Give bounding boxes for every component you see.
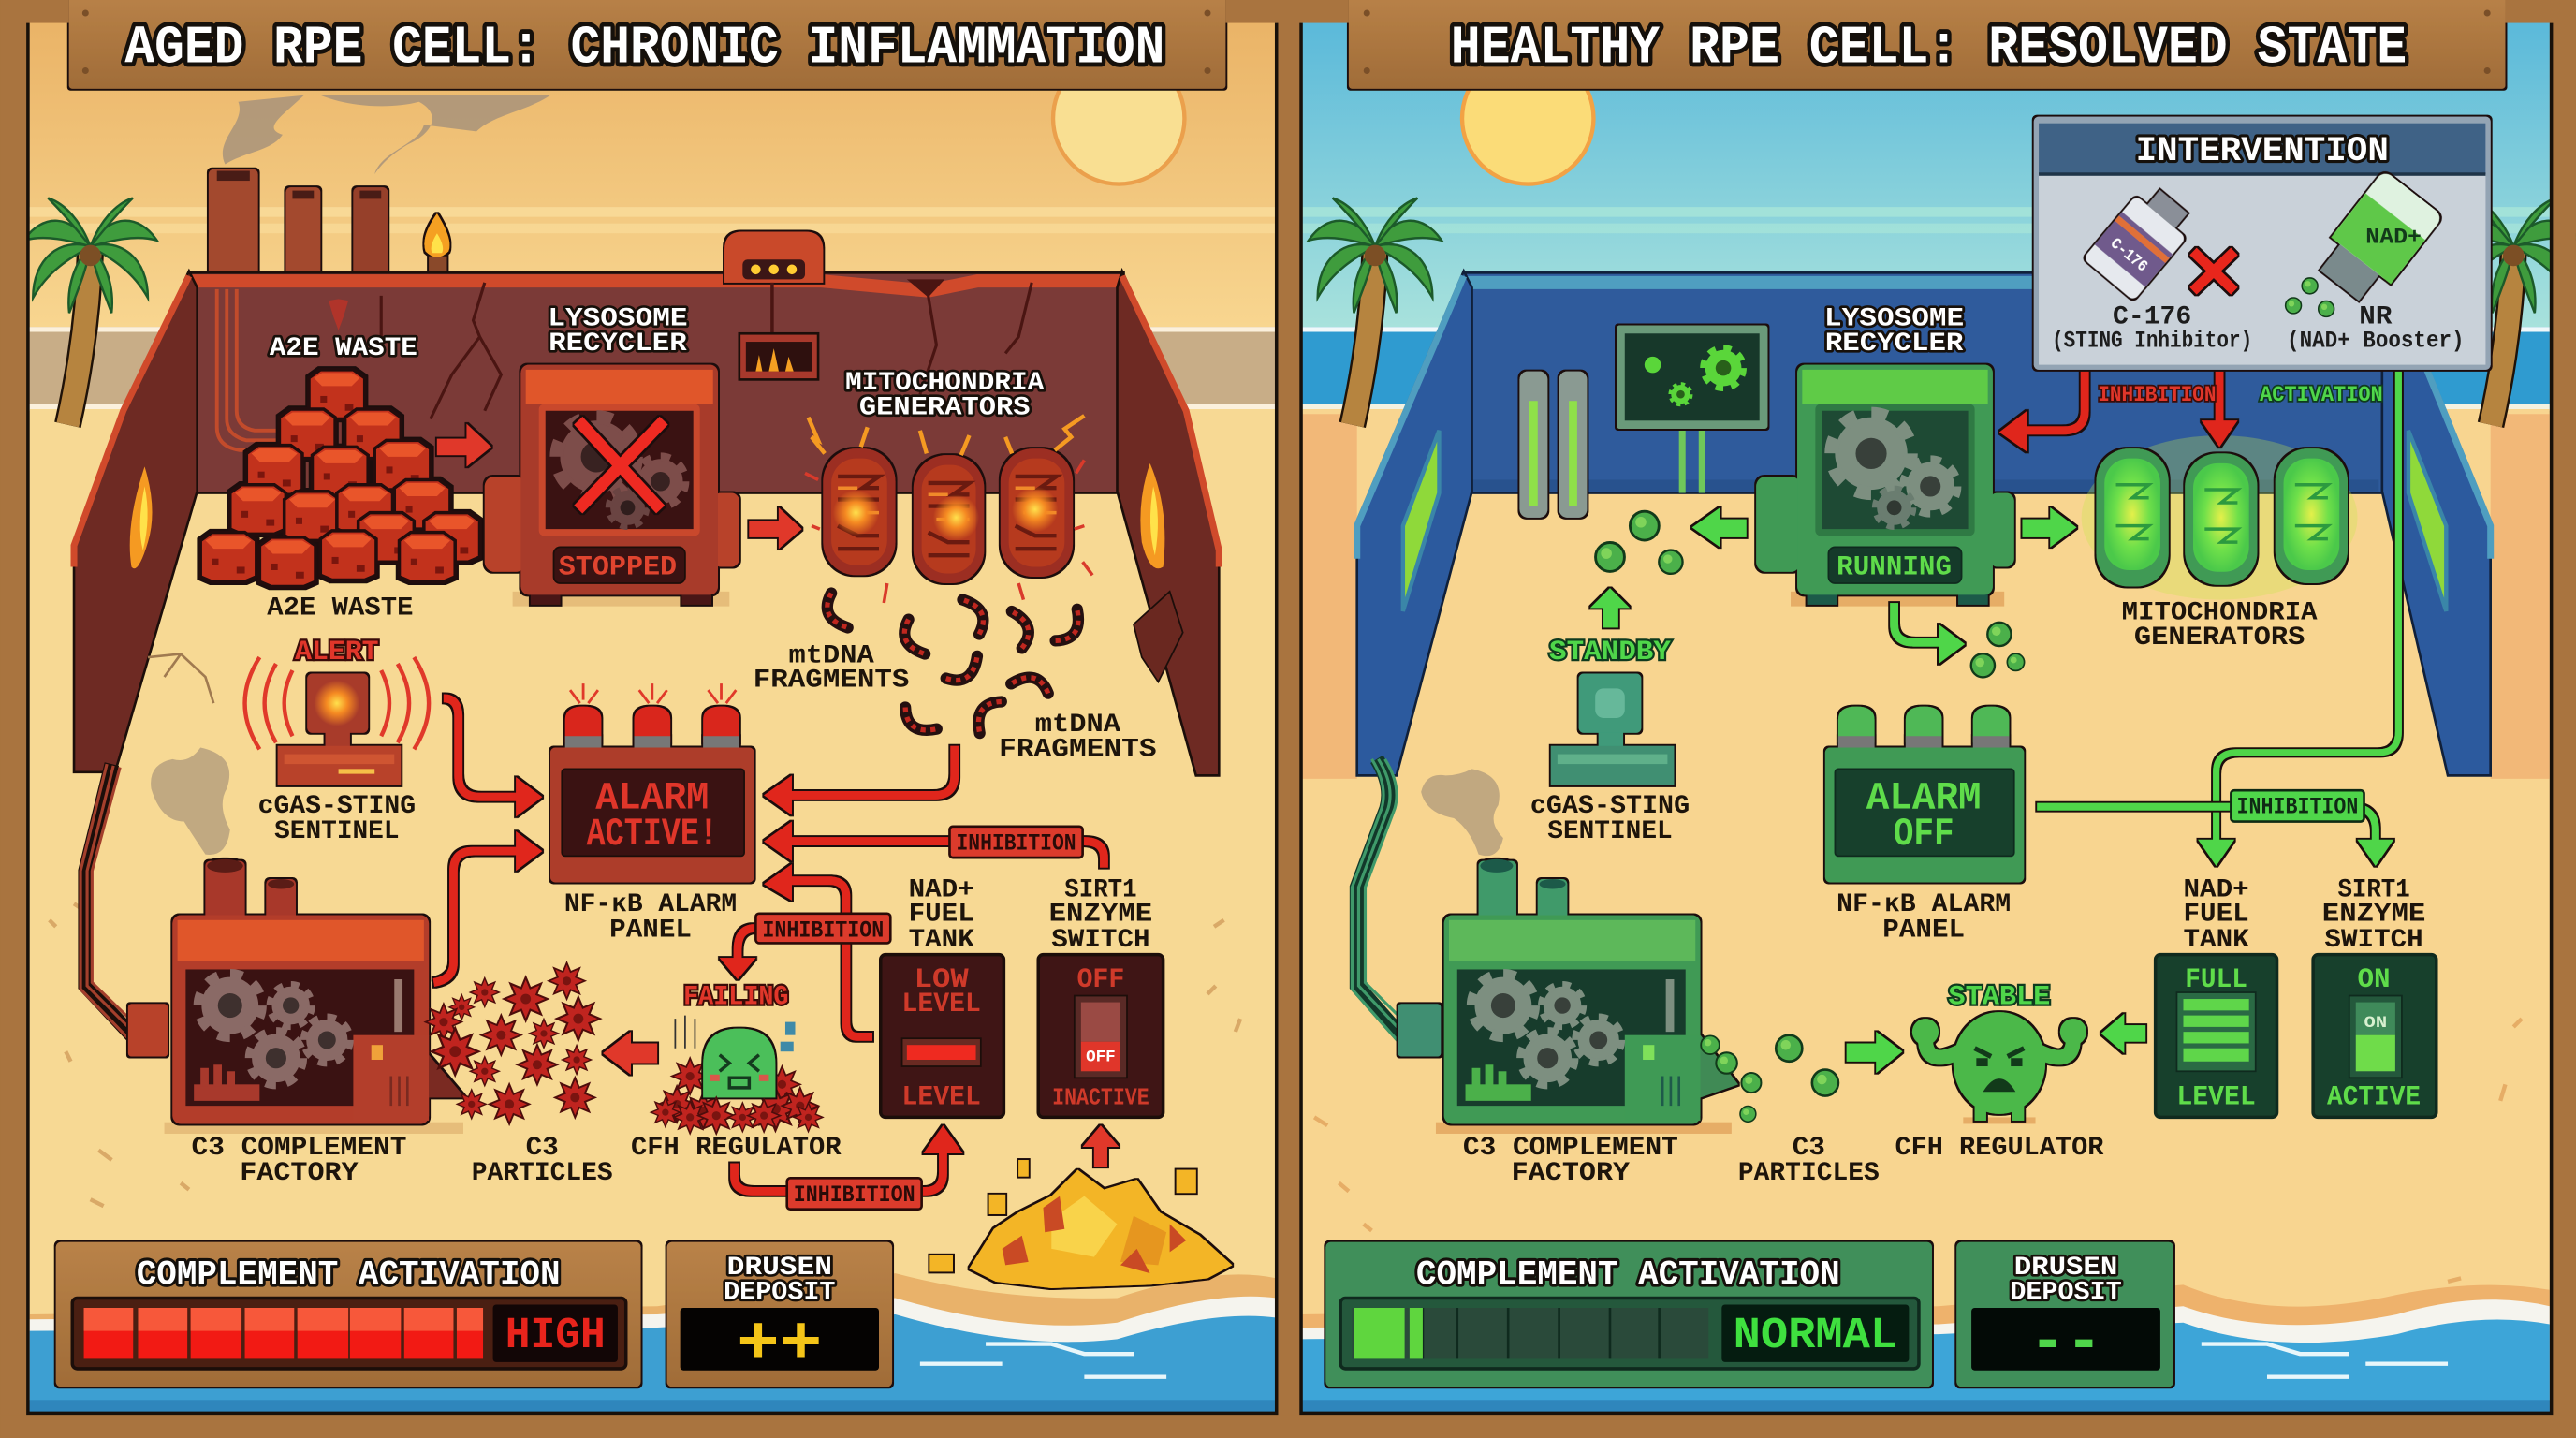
label: C3 particles: C3 [1793, 1134, 1825, 1163]
status: stopped: STOPPED [559, 550, 677, 582]
label: activation green: ACTIVATION [2260, 383, 2383, 407]
panel: complement activation normal [1325, 1242, 1932, 1387]
chimneys and torch [209, 169, 449, 281]
label: SIRT1 enzyme switch [1049, 875, 1152, 955]
label: NF-kB alarm panel: NF-κB ALARM [564, 890, 737, 919]
status: failing: FAILING [683, 980, 788, 1012]
gauge: NAD+ low level: LEVEL [902, 1080, 981, 1112]
label: inhibition red: INHIBITION [2098, 383, 2217, 407]
heading: DRUSEN [2014, 1254, 2117, 1283]
label: mtDNA fragments lower: FRAGMENTS [999, 735, 1157, 764]
label: inhibition green: INHIBITION [2237, 796, 2358, 821]
arrow: particles to CFH [1847, 1032, 1902, 1073]
wall: left side wall [74, 271, 198, 772]
label: SIRT1 enzyme switch: SIRT1 [1064, 875, 1137, 904]
label: mtDNA fragments lower: mtDNA [1035, 711, 1120, 740]
wall: right side wall [2382, 271, 2491, 775]
icon: recycled particles right [1971, 623, 2025, 677]
icon: standby tubes on wall [1519, 372, 1587, 518]
label: cGAS-STING sentinel: SENTINEL [274, 817, 400, 846]
label: NAD+ fuel tank: FUEL [909, 901, 974, 930]
gauge: SIRT1 switch off: INACTIVE [1052, 1083, 1149, 1111]
label: NR: (NAD+ Booster) [2287, 329, 2465, 354]
arrow: inhibition to CFH [720, 929, 759, 979]
arrow: recycler to mitochondria [749, 507, 802, 549]
icon: C-176 vial [2084, 181, 2199, 301]
gauge: NAD+ low level [881, 955, 1003, 1117]
heading: DEPOSIT [2010, 1278, 2122, 1307]
label: C3 particles [472, 1134, 613, 1188]
icon: strong CFH regulator [1912, 1012, 2086, 1123]
arrow: C-176 inhibits recycler [1999, 372, 2085, 452]
panel: drusen deposit plus [667, 1242, 892, 1387]
arrow: SIRT1 inhibition to alarm [764, 822, 1104, 868]
status: alarm off: OFF [1894, 812, 1954, 857]
gauge: NAD+ low level: LOW [915, 963, 969, 995]
label: SIRT1 enzyme switch: ENZYME [1049, 901, 1152, 930]
label: SIRT1 enzyme switch: SWITCH [1051, 926, 1150, 955]
gauge: NAD+ full level: LEVEL [2176, 1080, 2256, 1112]
label: cGAS-STING sentinel: cGAS-STING [258, 792, 416, 821]
machine: C3 complement factory [1398, 859, 1738, 1134]
panel: healthy RPE cell [1301, 0, 2576, 1413]
wall lamp housing [724, 231, 823, 283]
status: alarm active: ACTIVE! [587, 812, 718, 857]
heading: DRUSEN [727, 1254, 832, 1283]
status: normal: NORMAL [1734, 1312, 1897, 1361]
label: SIRT1 enzyme switch: SIRT1 [2337, 875, 2410, 904]
label: NF-kB alarm panel: PANEL [609, 916, 692, 945]
scene: dusk sky, sea and sand [30, 0, 1277, 1413]
bar: complement level [1352, 1308, 1708, 1358]
label: A2E waste: A2E WASTE [267, 594, 413, 623]
wall: left side wall [1357, 271, 1472, 775]
icon: cGAS-STING sentinel alerting [245, 657, 429, 785]
machine: NF-kB alarm panel off [1825, 707, 2024, 882]
icon: failing CFH regulator [651, 1016, 823, 1134]
arrow: NAD+ tank to CFH [2101, 1014, 2145, 1053]
label: C-176 [2052, 303, 2252, 354]
label: C-176: C-176 [2113, 303, 2191, 332]
heading: INTERVENTION [2136, 132, 2389, 171]
label: C3 complement factory: C3 COMPLEMENT [192, 1134, 407, 1163]
icon: midday sun [1462, 52, 1593, 184]
label: NAD+ fuel tank: NAD+ [2183, 875, 2249, 904]
arrow: recycler output left [1692, 507, 1747, 547]
label: inhibition NAD+: INHIBITION [794, 1183, 915, 1209]
label: lysosome recycler: LYSOSOME [1824, 304, 1964, 333]
arrow: sentinel to particles [1590, 588, 1630, 627]
label: CFH regulator: CFH REGULATOR [1895, 1134, 2104, 1163]
machine: stopped lysosome recycler [485, 365, 739, 607]
label: NAD+ fuel tank [909, 875, 974, 955]
icon: palm tree [24, 198, 157, 425]
pipes: wall to factory [85, 764, 135, 1038]
icon: cGAS-STING sentinel standby [1551, 674, 1674, 785]
wall: back wall [1466, 272, 2389, 493]
arrow: CFH inhibition to NAD+ [735, 1125, 963, 1191]
label: C3 particles: PARTICLES [472, 1159, 613, 1188]
gauge: NAD+ low level: LEVEL [902, 988, 981, 1020]
label: mtDNA fragments: mtDNA [788, 641, 874, 670]
heading: COMPLEMENT ACTIVATION [137, 1256, 561, 1296]
heading: DEPOSIT [724, 1278, 836, 1307]
label: cGAS-STING sentinel: SENTINEL [1547, 817, 1673, 846]
label: cGAS-STING sentinel [258, 792, 416, 846]
machine: NF-kB alarm panel active [550, 683, 754, 882]
label: C-176: (STING Inhibitor) [2052, 329, 2252, 354]
label: inhibition CFH: INHIBITION [762, 918, 884, 944]
smoke plumes [223, 95, 550, 174]
label: lysosome recycler: RECYCLER [549, 330, 687, 359]
arrow: fragments to alarm [764, 746, 955, 814]
label: C3 complement factory: FACTORY [240, 1159, 359, 1188]
arrow: factory to alarm [433, 831, 542, 983]
label: NF-kB alarm panel [564, 890, 737, 945]
label: lysosome recycler [548, 304, 688, 359]
smoke patch [151, 748, 230, 855]
heading [2010, 1254, 2122, 1307]
wall: right side wall [1117, 271, 1219, 775]
label: CFH regulator: CFH REGULATOR [631, 1134, 842, 1163]
icon: right palm tree [2447, 198, 2576, 425]
label: mitochondria generators [2122, 599, 2318, 653]
title: HEALTHY RPE CELL: RESOLVED STATE [1451, 19, 2407, 80]
label: NR [2287, 303, 2465, 354]
monitor: wall gear screen [1617, 325, 1767, 493]
label: lysosome recycler [1824, 304, 1964, 359]
icon: mtDNA fragments [827, 594, 1088, 740]
label: SIRT1 enzyme switch: SWITCH [2324, 926, 2423, 955]
gauge: SIRT1 switch off: OFF [1076, 963, 1124, 995]
label: NAD+ fuel tank [2183, 875, 2249, 955]
arrow: CFH to particles [603, 1032, 657, 1075]
floor cracks [148, 654, 213, 703]
label: cGAS-STING sentinel [1530, 792, 1690, 846]
wall: back wall with cracks [191, 272, 1123, 493]
scene: bright sky, sea and sand [1301, 0, 2550, 1413]
gauge: NAD+ full level [2156, 955, 2277, 1117]
label: C3 particles: C3 [526, 1134, 559, 1163]
arrow: recycler to lower particles [1895, 603, 1965, 664]
panel: intervention [2034, 117, 2491, 370]
icon: healthy mitochondria [2082, 435, 2358, 600]
label: NAD+ fuel tank: NAD+ [909, 875, 974, 904]
pipes: wall to factory [1357, 759, 1406, 1042]
label: lysosome recycler: LYSOSOME [548, 304, 688, 333]
panel: complement activation high [56, 1242, 641, 1387]
status: running: RUNNING [1837, 550, 1952, 582]
status: alarm active: ALARM [595, 775, 709, 820]
wall monitor with flames [739, 283, 818, 379]
label: mitochondria generators: GENERATORS [2134, 624, 2305, 653]
status: alarm off: ALARM [1866, 775, 1982, 820]
gauge: SIRT1 switch off: OFF [1086, 1049, 1116, 1067]
label: NAD+ fuel tank: TANK [2183, 926, 2249, 955]
heading [724, 1254, 836, 1307]
machine: running lysosome recycler [1756, 365, 2014, 607]
value: minus minus: -- [2029, 1307, 2102, 1381]
status: alert: ALERT [295, 636, 379, 668]
label: SIRT1 enzyme switch [2322, 875, 2425, 955]
label: NF-kB alarm panel: PANEL [1882, 916, 1965, 945]
label: lysosome recycler: RECYCLER [1825, 330, 1963, 359]
icon: C3 particles calm [1701, 1035, 1838, 1122]
panel: drusen deposit minus [1956, 1242, 2174, 1387]
gauge: SIRT1 switch on [2313, 955, 2437, 1117]
label: NR: NR [2359, 303, 2393, 332]
label: SIRT1 enzyme switch: ENZYME [2322, 901, 2425, 930]
icon: NAD+ booster bottle: NAD+ [2365, 226, 2422, 250]
label: NF-kB alarm panel [1837, 890, 2011, 945]
title board: aged [69, 0, 1225, 89]
arrow: activation line to NAD+ tank [2198, 372, 2398, 866]
icon: damaged mitochondria [805, 416, 1092, 603]
label: C3 particles [1738, 1134, 1880, 1188]
panel: aged RPE cell [24, 0, 1277, 1413]
gauge: NAD+ full level: FULL [2185, 963, 2247, 995]
smoke patch [1421, 769, 1503, 856]
status: alarm off [1866, 775, 1982, 857]
bar: complement level [84, 1308, 483, 1358]
label: A2E waste on wall: A2E WASTE [270, 334, 417, 363]
label: mtDNA fragments: FRAGMENTS [754, 667, 909, 696]
label: mitochondria generators: MITOCHONDRIA [845, 369, 1045, 398]
icon: A2E waste pile [200, 370, 480, 587]
label: C3 complement factory: C3 COMPLEMENT [1463, 1134, 1678, 1163]
status: alarm active [587, 775, 718, 857]
label: mitochondria generators [845, 369, 1045, 422]
icon: red inhibition cross [2193, 252, 2234, 291]
icon: C-176 vial: C-176 [2106, 234, 2151, 276]
arrow: waste to recycler [437, 424, 491, 466]
label: C3 particles: PARTICLES [1738, 1159, 1880, 1188]
arrow: NAD+ to alarm [764, 864, 872, 1036]
arrow: drusen to SIRT1 [1083, 1125, 1119, 1167]
label: mitochondria generators: GENERATORS [859, 393, 1030, 422]
icon: setting sun [1053, 52, 1184, 184]
label: C3 complement factory: FACTORY [1512, 1159, 1630, 1188]
label: mitochondria generators: MITOCHONDRIA [2122, 599, 2318, 628]
label: C3 complement factory [1463, 1134, 1678, 1188]
label: inhibition SIRT1: INHIBITION [956, 831, 1076, 857]
title: AGED RPE CELL: CHRONIC INFLAMMATION [124, 19, 1164, 80]
label: NAD+ fuel tank: FUEL [2183, 901, 2249, 930]
gauge: SIRT1 switch on: ACTIVE [2327, 1080, 2421, 1112]
icon: NAD+ booster bottle [2286, 170, 2443, 316]
icon: red stop cross [578, 420, 664, 509]
title board: healthy [1349, 0, 2505, 89]
machine: C3 complement factory [128, 859, 465, 1134]
label: mtDNA fragments [754, 641, 909, 696]
status: high: HIGH [505, 1312, 606, 1361]
arrow: sentinel to alarm [444, 698, 542, 816]
gauge: SIRT1 switch on: ON [2364, 1014, 2387, 1033]
heading: COMPLEMENT ACTIVATION [1416, 1256, 1840, 1296]
label: cGAS-STING sentinel: cGAS-STING [1530, 792, 1690, 821]
icon: drusen deposit pile [929, 1160, 1232, 1288]
value: plus plus: ++ [737, 1308, 822, 1386]
arrow: recycler output right [2022, 507, 2076, 547]
arrow: alarm off branch to SIRT1 [2037, 807, 2393, 866]
status: standby: STANDBY [1549, 636, 1671, 668]
label: NAD+ fuel tank: TANK [909, 926, 974, 955]
icon: C3 particles [426, 962, 600, 1124]
icon: left palm tree [1309, 198, 1442, 425]
arrow: NR activates mitochondria [2202, 372, 2237, 447]
status: stable: STABLE [1949, 980, 2050, 1012]
label: mtDNA fragments lower [999, 711, 1157, 764]
gauge: SIRT1 switch off [1038, 955, 1164, 1117]
gauge: SIRT1 switch on: ON [2358, 963, 2391, 995]
icon: recycled particles left [1596, 511, 1683, 574]
label: C3 complement factory [192, 1134, 407, 1188]
label: NF-kB alarm panel: NF-κB ALARM [1837, 890, 2011, 919]
